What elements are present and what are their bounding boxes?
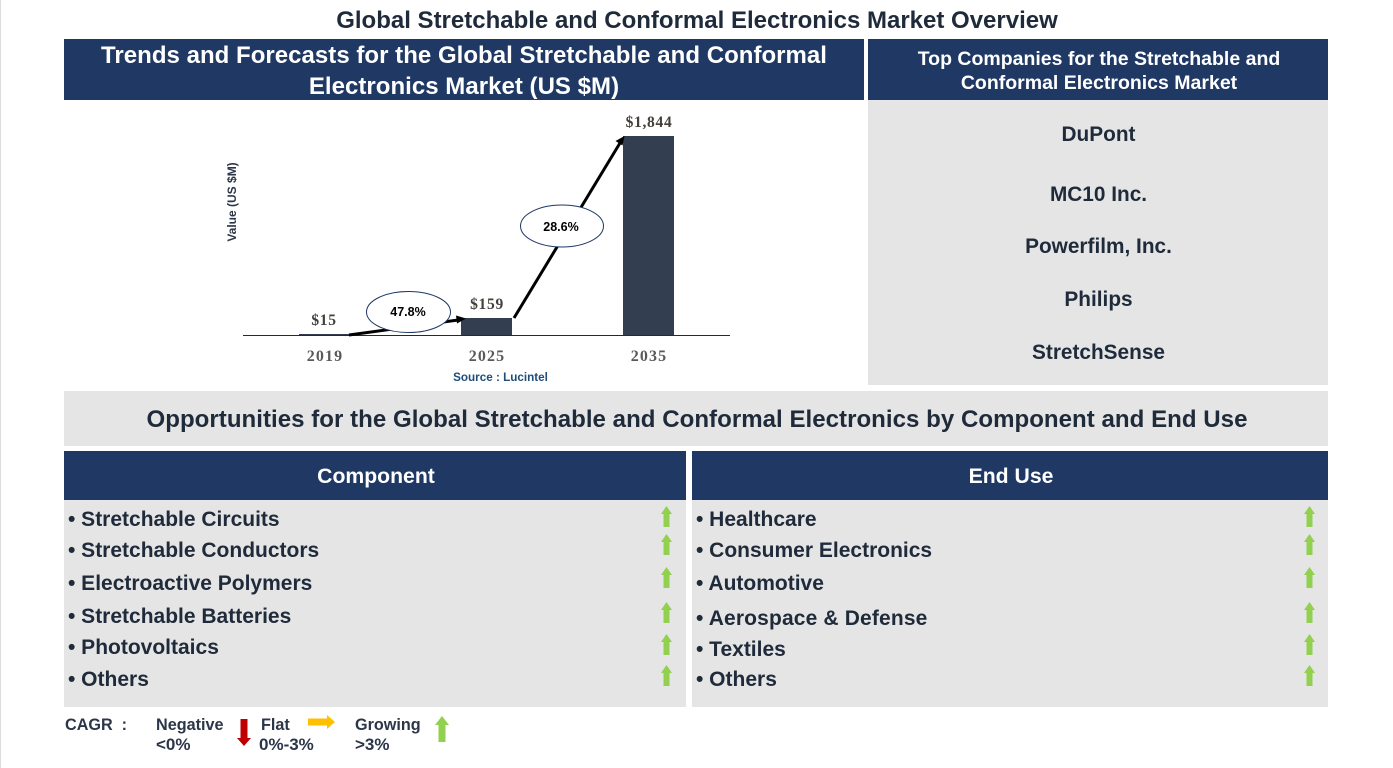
item: Stretchable Conductors: • Stretchable Conductors <box>68 539 319 562</box>
value labels: $15 <box>311 312 337 329</box>
legend: growing <box>355 716 421 754</box>
panel header: trends and forecasts: Trends and Forecasts for the Global Stretchable and Conformal <box>101 42 827 69</box>
header: component <box>64 451 686 500</box>
x axis <box>243 334 730 336</box>
panel: end use list <box>692 500 1328 707</box>
icon: right arrow <box>308 715 335 729</box>
panel header: top companies: Conformal Electronics Market <box>961 72 1237 94</box>
legend label: CAGR : <box>65 716 127 734</box>
company: DuPont: DuPont <box>1062 123 1135 146</box>
header: end use <box>692 451 1328 500</box>
icon: up arrow <box>661 634 672 655</box>
source: Source : Lucintel <box>453 371 548 384</box>
legend: growing: Growing <box>355 716 421 734</box>
value labels <box>311 114 672 329</box>
icon: up arrow <box>1304 506 1315 527</box>
item: Stretchable Batteries: • Stretchable Batteries <box>68 605 291 628</box>
panel header: top companies <box>868 39 1328 100</box>
y axis title: Value (US $M) <box>225 162 239 242</box>
year labels <box>307 348 667 365</box>
item: Consumer Electronics: • Consumer Electronics <box>696 539 932 562</box>
item: Others: • Others <box>696 668 777 691</box>
legend: negative <box>156 716 223 754</box>
callout: 47.8% <box>366 292 450 332</box>
item: Automotive: • Automotive <box>696 572 824 595</box>
header: end use: End Use <box>969 465 1053 488</box>
item: Healthcare: • Healthcare <box>696 508 817 531</box>
callout: 47.8%: 47.8% <box>390 305 426 319</box>
item: Stretchable Circuits: • Stretchable Circuits <box>68 508 280 531</box>
company: StretchSense: StretchSense <box>1032 341 1165 364</box>
value labels: $1,844 <box>626 114 672 131</box>
item: Aerospace & Defense: • Aerospace & Defense <box>696 607 927 630</box>
legend: negative: <0% <box>156 735 190 754</box>
company: Philips: Philips <box>1064 288 1133 311</box>
title: Global Stretchable and Conformal Electronics Market Overview <box>336 7 1058 34</box>
bar chart: market value <box>225 114 730 384</box>
icon: up arrow <box>435 716 449 742</box>
icon: up arrow <box>661 534 672 555</box>
icon: up arrow <box>1304 634 1315 655</box>
year labels: 2035 <box>631 348 667 365</box>
legend: negative: Negative <box>156 716 223 734</box>
legend: flat <box>259 716 314 754</box>
icon: up arrow <box>661 602 672 623</box>
year labels: 2025 <box>469 348 505 365</box>
company: MC10 Inc.: MC10 Inc. <box>1050 183 1147 206</box>
heading: opportunities <box>64 391 1328 446</box>
header: component: Component <box>317 465 435 488</box>
company: Powerfilm, Inc.: Powerfilm, Inc. <box>1025 235 1172 258</box>
icon: up arrow <box>661 506 672 527</box>
item: Photovoltaics: • Photovoltaics <box>68 636 219 659</box>
growth arrows <box>349 136 624 335</box>
icon: up arrow <box>661 665 672 686</box>
panel header: trends and forecasts: Electronics Market (US $M) <box>309 73 619 100</box>
value labels: $159 <box>470 296 504 313</box>
callout: 28.6%: 28.6% <box>543 220 579 234</box>
panel header: top companies: Top Companies for the Stretchable and <box>918 48 1280 70</box>
panel: top companies <box>868 100 1328 385</box>
bars <box>299 136 674 335</box>
icon: up arrow <box>1304 567 1315 588</box>
year labels: 2019 <box>307 348 343 365</box>
icon: up arrow <box>1304 534 1315 555</box>
legend: flat: Flat <box>261 716 290 734</box>
icon: up arrow <box>1304 602 1315 623</box>
panel header: trends and forecasts <box>64 39 864 100</box>
icon: up arrow <box>1304 665 1315 686</box>
callout: 28.6% <box>520 205 604 247</box>
item: Electroactive Polymers: • Electroactive Polymers <box>68 572 312 595</box>
legend: flat: 0%-3% <box>259 735 314 754</box>
icon: up arrow <box>661 567 672 588</box>
item: Others: • Others <box>68 668 149 691</box>
legend: growing: >3% <box>355 735 390 754</box>
item: Textiles: • Textiles <box>696 638 786 661</box>
legend: CAGR <box>65 715 449 754</box>
panel: component list <box>64 500 686 707</box>
icon: down arrow <box>237 719 251 746</box>
heading: opportunities: Opportunities for the Global Stretchable and Conformal Electronics by Component and End Use <box>146 406 1248 433</box>
